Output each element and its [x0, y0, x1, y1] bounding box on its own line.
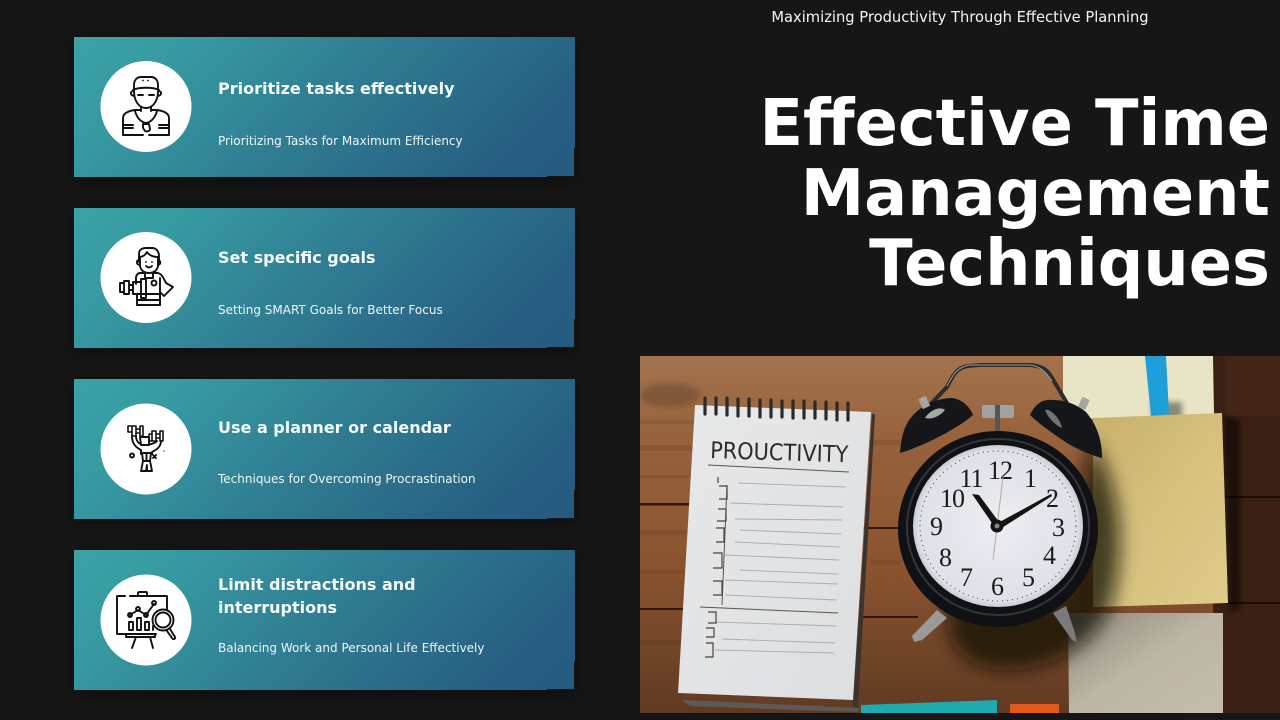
clock numerals: 6: [991, 572, 1004, 601]
title: [759, 87, 1270, 301]
clock numerals: [930, 456, 1064, 601]
clock numerals: 8: [939, 543, 952, 572]
heading: Use a planner or calendar: [218, 418, 451, 437]
corner notch: [547, 661, 575, 690]
clock numerals: 7: [960, 563, 973, 592]
sticky notes: [1063, 356, 1240, 713]
clock shadow: [948, 440, 1120, 670]
corner notch: [547, 148, 575, 177]
heading: [218, 575, 416, 617]
corner notch: [547, 490, 575, 519]
heading: Set specific goals: [218, 248, 376, 267]
card: planner or calendar: [74, 379, 575, 519]
description: Balancing Work and Personal Life Effectively: [218, 641, 484, 655]
description: Prioritizing Tasks for Maximum Efficiency: [218, 134, 463, 148]
panel: task cards list: [74, 37, 575, 690]
title: Management: [801, 157, 1270, 231]
title: Techniques: [869, 227, 1270, 301]
clock numerals: 2: [1046, 484, 1058, 513]
icon: man with dumbbell: [100, 232, 192, 323]
clock numerals: 12: [988, 456, 1012, 485]
notebook: PROUCTIVITY: [710, 438, 849, 468]
notebook: [678, 398, 875, 712]
wood background: [640, 356, 1280, 713]
clock numerals: 10: [940, 484, 965, 513]
card: prioritize tasks: [74, 37, 575, 177]
icon: weightlifter: [100, 404, 192, 494]
card: set goals: [74, 208, 575, 348]
heading: interruptions: [218, 598, 337, 617]
clock numerals: 1: [1024, 464, 1036, 493]
corner notch: [547, 319, 575, 348]
clock numerals: 3: [1052, 513, 1064, 542]
subtitle: Maximizing Productivity Through Effective Planning: [771, 9, 1149, 26]
icon: coach with whistle: [100, 61, 192, 152]
teal and orange markers: [861, 700, 1059, 713]
icon: presentation board with magnifier: [100, 574, 192, 666]
title: Effective Time: [759, 87, 1270, 161]
clock numerals: 9: [930, 512, 942, 541]
clock numerals: 4: [1043, 541, 1056, 570]
photo: alarm clock, notebook and sticky notes on wood desk: [640, 356, 1280, 713]
description: Setting SMART Goals for Better Focus: [218, 303, 443, 317]
heading: Limit distractions and: [218, 575, 416, 594]
clock numerals: 11: [959, 464, 983, 493]
heading: Prioritize tasks effectively: [218, 79, 455, 98]
alarm clock: [898, 365, 1102, 642]
description: Techniques for Overcoming Procrastination: [218, 472, 476, 486]
card: limit distractions: [74, 550, 575, 690]
clock numerals: 5: [1022, 563, 1034, 592]
